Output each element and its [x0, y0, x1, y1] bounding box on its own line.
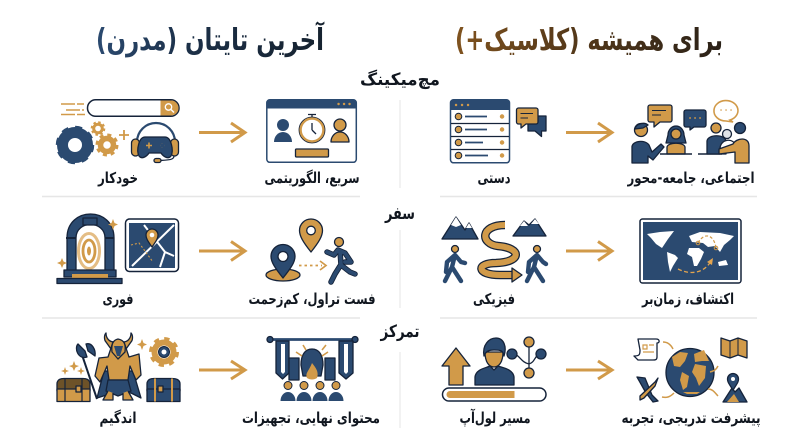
icon: chat bubbles — [516, 108, 546, 136]
arrow — [566, 361, 612, 379]
icon: gears — [58, 122, 129, 162]
panel: modern focus — [57, 333, 380, 427]
panel: classic focus — [442, 337, 760, 428]
arrow — [566, 123, 612, 142]
label: manual: دستی — [478, 169, 511, 187]
icon: world map — [640, 219, 741, 283]
icon: globe with tools — [634, 338, 747, 402]
icon: progress bar — [442, 388, 546, 401]
title: modern column: آخرین تایتان (مدرن) — [96, 21, 325, 58]
icon: mountains left — [442, 217, 478, 239]
icon: treasure chest gold — [57, 378, 90, 402]
panel: modern travel — [57, 214, 376, 308]
arrow — [199, 123, 245, 142]
icon: headset and gamepad — [132, 123, 178, 162]
label: social, community: اجتماعی، جامعه-محور — [627, 169, 754, 187]
heading: focus: تمرکز — [380, 322, 420, 342]
icon: winding road — [481, 225, 522, 282]
label: fast travel, low effort: فست تراول، کم‌زحمت — [248, 290, 376, 308]
icon: portal arch — [57, 214, 122, 284]
icon: raid hall — [267, 336, 358, 401]
heading: travel: سفر — [384, 204, 415, 224]
icon: search bar — [61, 100, 179, 116]
icon: social group — [632, 101, 749, 163]
label: physical: فیزیکی — [473, 290, 515, 308]
label: automatic: خودکار — [97, 169, 138, 187]
icon: treasure chest navy — [147, 378, 180, 402]
heading: matchmaking: مچ‌میکینگ — [360, 69, 440, 90]
icon: folded map — [126, 219, 178, 272]
icon: armored warrior — [61, 333, 147, 400]
icon: person — [475, 338, 514, 385]
label: exploration, time-consuming: اکتشاف، زمان‌بر — [641, 290, 734, 308]
icon: level up arrow — [442, 348, 470, 385]
label: fast algorithmic: سریع، الگوریتمی — [264, 169, 360, 187]
label: endgame: اندگیم — [100, 409, 136, 427]
panel: modern matchmaking — [58, 100, 360, 187]
panel: classic matchmaking — [450, 100, 754, 187]
label: gradual progress, experience: پیشرفت تدریجی، تجربه — [622, 409, 760, 428]
label: final content, gear: محتوای نهایی، تجهیزات — [242, 409, 380, 427]
icon: hikers — [445, 246, 546, 281]
icon: fast travel pins and runner — [266, 219, 355, 282]
icon: server list — [450, 100, 510, 163]
icon: skill tree — [507, 337, 546, 378]
panel: classic travel — [442, 217, 741, 308]
label: level-up path: مسیر لول‌آپ — [460, 409, 530, 427]
icon: mountains right — [513, 219, 546, 236]
arrow — [199, 242, 245, 260]
arrow — [199, 361, 245, 379]
arrow — [566, 242, 612, 260]
label: instant: فوری — [102, 290, 134, 308]
icon: algorithmic match window — [267, 100, 356, 162]
icon: gold gear — [150, 338, 178, 366]
